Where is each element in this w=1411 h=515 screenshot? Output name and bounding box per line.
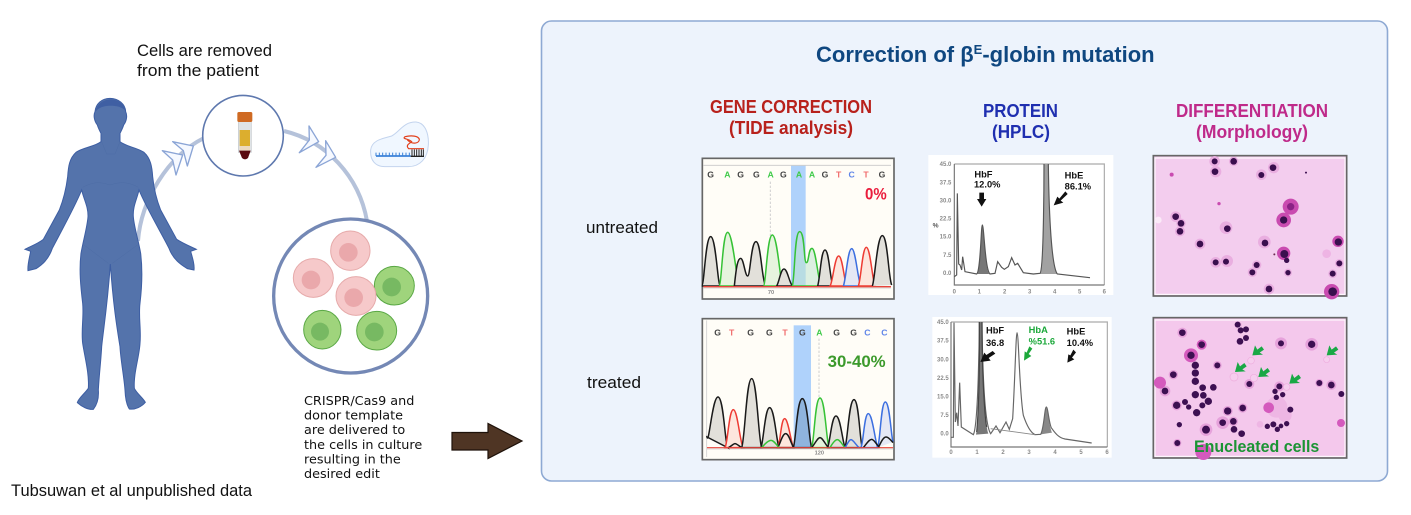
unedited cell (336, 277, 376, 315)
micrograph: treated (1153, 318, 1347, 460)
chromatogram: treated: T (729, 327, 735, 337)
chromatogram: untreated: A (768, 169, 775, 179)
panel title: -globin mutation (982, 42, 1155, 67)
panel title: E (974, 42, 983, 57)
HPLC chart: untreated: 7.5 (943, 253, 952, 259)
text: citation: Tubsuwan et al unpublished data (11, 482, 253, 500)
edited cell (304, 310, 341, 349)
HPLC chart: untreated: 45.0 (940, 162, 952, 168)
heading: gene correction (710, 97, 872, 138)
HPLC chart: treated: 0 (949, 450, 953, 456)
HPLC chart: untreated (928, 155, 1113, 296)
HPLC chart: untreated: % (933, 222, 939, 229)
text: CRISPR description: resulting in the (304, 452, 401, 467)
micrograph: untreated (1153, 156, 1347, 299)
edit percentage: 30-40%: 30-40% (828, 352, 886, 371)
HPLC chart: treated: 45.0 (937, 320, 949, 326)
chromatogram: untreated: G (822, 169, 829, 179)
chromatogram: treated: G (747, 327, 754, 337)
row label: treated: treated (587, 373, 641, 392)
arrow: to results panel (452, 424, 522, 458)
heading: gene correction: GENE CORRECTION (710, 97, 872, 117)
heading: differentiation (1176, 101, 1328, 142)
chromatogram: untreated: A (796, 169, 803, 179)
HPLC chart: treated: 22.5 (937, 376, 949, 382)
peak label: HbA (1029, 325, 1055, 347)
peak label: HbF: HbF (986, 326, 1004, 336)
chromatogram: untreated: T (863, 169, 869, 179)
arrow: HbA (1024, 346, 1032, 361)
HPLC chart: treated (932, 317, 1112, 458)
HPLC chart: treated: 7.5 (940, 413, 949, 419)
row label: untreated: untreated (586, 218, 658, 237)
arrow: HbF (980, 351, 995, 362)
chromatogram: treated: C (881, 327, 888, 337)
peak label: HbE (1065, 171, 1092, 192)
text: cells are removed: Cells are removed (137, 42, 272, 60)
chromatogram: treated: 120 (815, 451, 824, 457)
peak label: HbA: HbA (1029, 325, 1048, 335)
panel title: Correction of β (816, 42, 974, 67)
edited cell (374, 266, 414, 305)
chromatogram: untreated: 70 (768, 290, 774, 296)
HPLC chart: treated: 6 (1105, 450, 1109, 456)
heading: gene correction: (TIDE analysis) (729, 118, 853, 138)
unedited cell (331, 231, 370, 270)
heading: protein: PROTEIN (983, 101, 1058, 121)
chromatogram: untreated: T (836, 169, 842, 179)
sample circle with blood tube (203, 95, 283, 176)
arrow: HbE (1054, 191, 1068, 205)
chromatogram: untreated: C (849, 169, 856, 179)
heading: differentiation: (Morphology) (1196, 122, 1308, 142)
heading: protein (983, 101, 1058, 142)
HPLC chart: treated: 0.0 (940, 431, 949, 437)
edit percentage: 0%: 0% (865, 185, 887, 204)
text: CRISPR description: CRISPR/Cas9 and (304, 394, 414, 409)
icon: guide RNA and donor template (371, 122, 428, 167)
HPLC chart: treated: 15.0 (937, 394, 949, 400)
chromatogram: untreated: A (724, 169, 731, 179)
icon: human body (25, 98, 196, 409)
peak label: HbF (986, 326, 1004, 348)
chromatogram: treated: G (766, 327, 773, 337)
chromatogram: treated: G (850, 327, 857, 337)
arc: patient to sample (138, 138, 204, 241)
text: CRISPR description: are delivered to (304, 423, 405, 438)
text: CRISPR description: the cells in culture (304, 438, 422, 453)
chromatogram: untreated: A (809, 169, 816, 179)
text: from the patient: from the patient (137, 62, 259, 80)
chromatogram: untreated: G (737, 169, 744, 179)
HPLC chart: untreated: 3 (1028, 290, 1032, 296)
arrow: HbF (977, 193, 986, 207)
HPLC chart: treated: 4 (1053, 450, 1057, 456)
unedited cell (293, 259, 333, 297)
peak label: HbE: HbE (1065, 171, 1083, 181)
HPLC chart: treated: 1 (975, 450, 979, 456)
HPLC chart: untreated: 4 (1053, 290, 1057, 296)
HPLC chart: untreated: 1 (978, 290, 982, 296)
peak label: HbE (1067, 327, 1094, 348)
arc: sample to cell culture (284, 131, 367, 221)
chromatogram: treated: G (799, 327, 806, 337)
HPLC chart: treated: 3 (1027, 450, 1031, 456)
chromatogram: treated: T (782, 327, 788, 337)
chromatogram: untreated: G (879, 169, 886, 179)
peak label: HbF (974, 169, 1001, 190)
text: CRISPR description: donor template (304, 409, 403, 424)
arrowhead pair: to cell culture (299, 126, 336, 167)
edited cell (357, 311, 397, 350)
arrow: HbE (1067, 350, 1076, 363)
HPLC chart: untreated: 5 (1078, 290, 1082, 296)
HPLC chart: untreated: 30.0 (940, 198, 952, 204)
peak label: HbA: %51.6 (1029, 337, 1055, 347)
HPLC chart: treated: 2 (1001, 450, 1005, 456)
chromatogram: treated (702, 319, 894, 460)
text: CRISPR description: desired edit (304, 467, 380, 482)
chromatogram: untreated: G (780, 169, 787, 179)
chromatogram: treated: G (714, 327, 721, 337)
HPLC chart: untreated: 37.5 (940, 180, 952, 186)
peak label: HbF: HbF (974, 169, 993, 179)
HPLC chart: untreated: 0.0 (943, 271, 952, 277)
HPLC chart: treated: 30.0 (937, 357, 949, 363)
heading: differentiation: DIFFERENTIATION (1176, 101, 1328, 121)
peak label: HbE: 10.4% (1067, 338, 1094, 348)
arrows: enucleated cells (1235, 345, 1338, 384)
cell culture circle (274, 219, 428, 373)
HPLC chart: treated: 37.5 (937, 339, 949, 345)
HPLC chart: untreated: 2 (1003, 290, 1007, 296)
peak label: HbE: HbE (1067, 327, 1085, 337)
arrowhead pair: to sample (162, 142, 193, 175)
HPLC chart: untreated: 6 (1103, 290, 1107, 296)
chromatogram: treated: G (833, 327, 840, 337)
HPLC chart: untreated: 15.0 (940, 235, 952, 241)
HPLC chart: treated: 5 (1079, 450, 1083, 456)
chromatogram: untreated: G (707, 169, 714, 179)
peak label: HbF: 36.8 (986, 338, 1004, 348)
chromatogram: untreated (702, 158, 894, 299)
panel: correction results (542, 21, 1388, 481)
chromatogram: treated: A (816, 327, 823, 337)
chromatogram: untreated: G (753, 169, 760, 179)
peak label: HbE: 86.1% (1065, 182, 1092, 192)
chromatogram: treated: C (864, 327, 871, 337)
heading: protein: (HPLC) (992, 122, 1050, 142)
HPLC chart: untreated: 0 (953, 290, 957, 296)
label: enucleated cells: Enucleated cells (1194, 437, 1319, 456)
HPLC chart: untreated: 22.5 (940, 217, 952, 223)
peak label: HbF: 12.0% (974, 180, 1001, 190)
